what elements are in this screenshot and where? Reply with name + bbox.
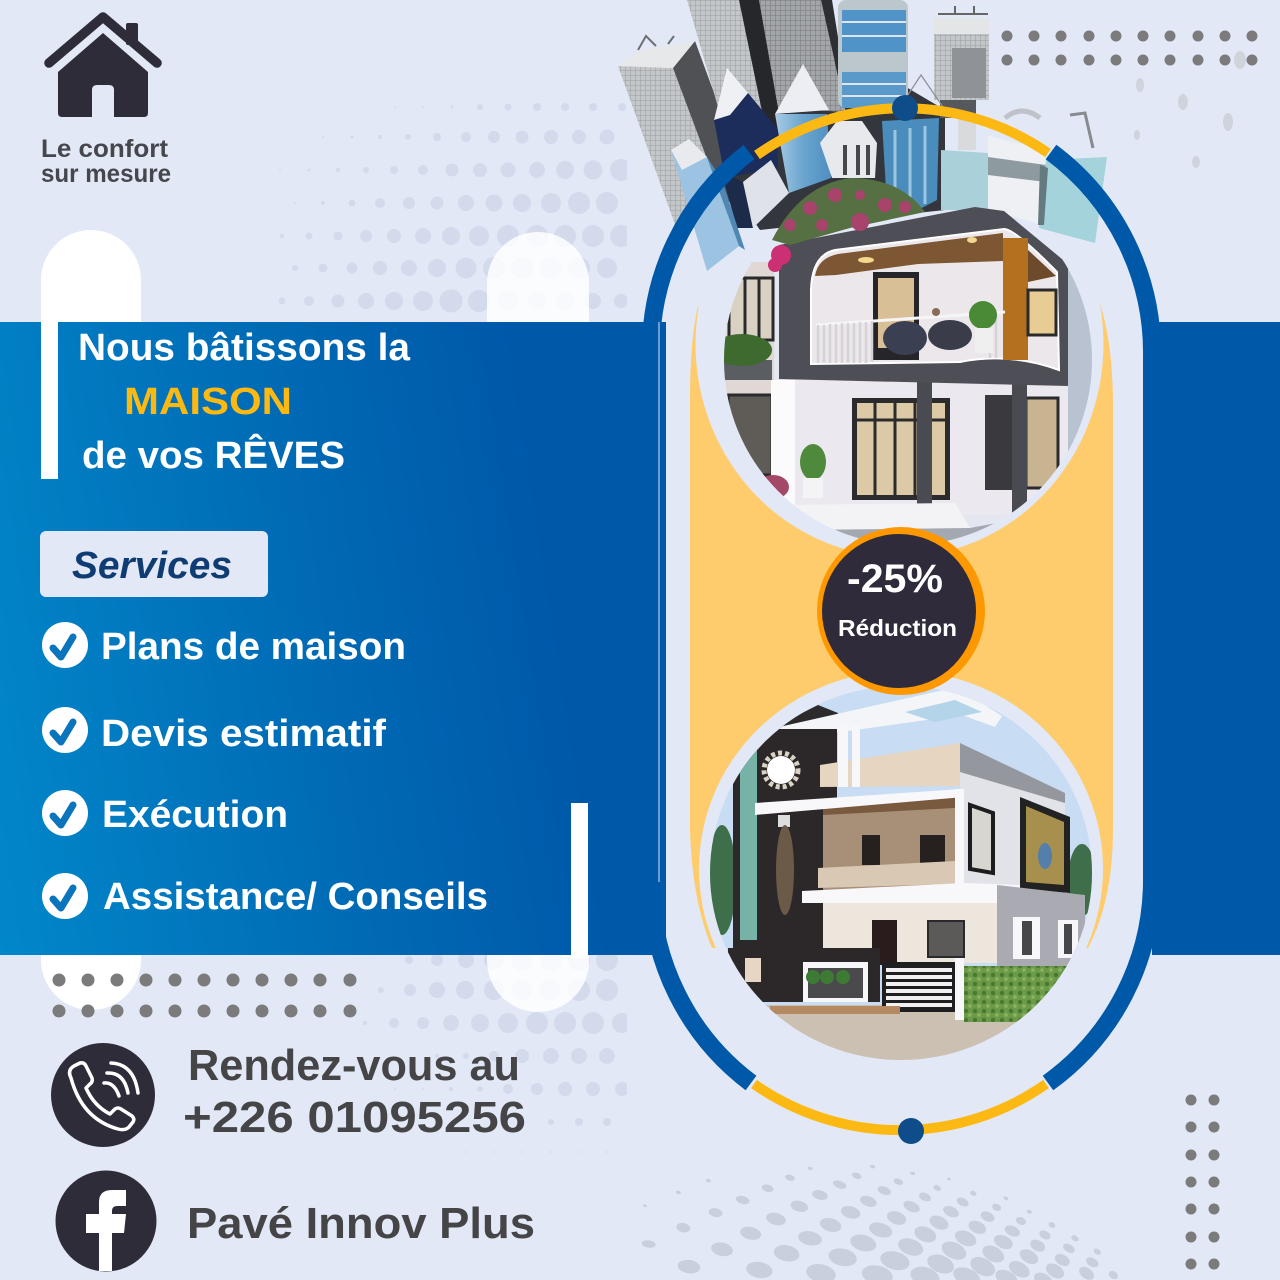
- dark blue tower: [714, 68, 778, 178]
- front left towers: [671, 139, 789, 271]
- dot columns lower right: [1186, 1094, 1220, 1270]
- icon: house: [49, 17, 157, 117]
- item: plans: Plans de maison: [101, 626, 406, 668]
- contact text: +226 01095256: [183, 1093, 526, 1142]
- upper frame: [779, 207, 1068, 386]
- facebook page name: Pavé Innov Plus: [187, 1199, 535, 1248]
- halftone dot texture top: [278, 103, 632, 312]
- headline: Nous bâtissons la: [78, 327, 411, 369]
- tower right: [934, 6, 989, 118]
- halftone dot texture bottom: [363, 949, 632, 1153]
- headline: [78, 327, 411, 477]
- capsule yellow arcs: [754, 108, 1048, 1130]
- headline: de vos RÊVES: [82, 433, 345, 477]
- capsule top dot: [892, 95, 918, 121]
- roof and slab: [779, 690, 1002, 732]
- badge percent: -25%: [847, 557, 943, 601]
- top house photo: [712, 207, 1094, 547]
- icon: phone: [51, 1043, 155, 1147]
- grey upper wall: [960, 743, 1065, 893]
- capsule bottom dot: [898, 1118, 924, 1144]
- blue band left: [0, 322, 666, 955]
- trees: [708, 825, 1096, 935]
- hedge: [964, 966, 1074, 1022]
- dark mass behind towers: [714, 60, 945, 230]
- halftone dot texture lower right: [641, 1164, 1119, 1280]
- contact text: Rendez-vous au: [188, 1041, 520, 1090]
- side windows: [970, 797, 1070, 893]
- ground floor: [771, 378, 1068, 523]
- item: devis: [42, 707, 386, 755]
- pale tower center right: [941, 118, 988, 210]
- blue center tower: [882, 75, 943, 214]
- logo: sur mesure: [41, 160, 171, 188]
- item: execution: Exécution: [102, 794, 288, 836]
- ground: [766, 1005, 1036, 1060]
- compound wall and gate: [728, 948, 964, 1020]
- plant and steps: [765, 444, 994, 541]
- white roof blue glass tower: [775, 64, 831, 193]
- logo: [41, 17, 171, 188]
- badge label: Réduction: [838, 615, 957, 641]
- blue band right: [1152, 322, 1280, 955]
- side building: [724, 262, 774, 476]
- ground floor: [823, 885, 1085, 968]
- capsule blue ring: [651, 152, 1152, 1083]
- item: execution: [42, 790, 288, 836]
- teal wall right: [988, 111, 1107, 243]
- item: assistance: Assistance/ Conseils: [103, 876, 488, 918]
- capsule panel background: [652, 106, 1150, 1130]
- paving: [770, 1006, 900, 1014]
- white accent bar left: [41, 322, 58, 479]
- services list: [42, 622, 488, 919]
- services label: Services: [72, 545, 232, 587]
- balcony: [755, 789, 1020, 903]
- dark tower: [733, 729, 837, 954]
- white accent bar right: [571, 803, 588, 958]
- dot rows lower left: [52, 974, 356, 1018]
- tower dark 1: [687, 0, 782, 130]
- balcony recess: [811, 229, 1059, 370]
- beige parapet: [820, 725, 960, 787]
- item: devis: Devis estimatif: [101, 713, 386, 755]
- headline: MAISON: [124, 381, 292, 423]
- contact text: [183, 1041, 526, 1142]
- services label: [40, 531, 268, 597]
- flowers: [768, 178, 925, 272]
- logo text: Le confort: [41, 135, 169, 163]
- icon: facebook: [56, 1170, 156, 1272]
- tower left grey: [618, 36, 735, 230]
- white pills behind band: [41, 230, 589, 1012]
- blue cylinder tower: [838, 0, 908, 108]
- discount badge: [817, 527, 985, 695]
- light ellipses around photos: [695, 296, 1104, 1067]
- octagon white tower: [820, 121, 877, 178]
- yellow panel: [690, 304, 1113, 948]
- tower dark 2: [759, 0, 850, 112]
- bottom house photo: [708, 684, 1098, 1065]
- grey flecks top right: [1134, 51, 1246, 168]
- skyscrapers illustration: [618, 0, 1107, 271]
- dot rows top right: [1002, 30, 1258, 66]
